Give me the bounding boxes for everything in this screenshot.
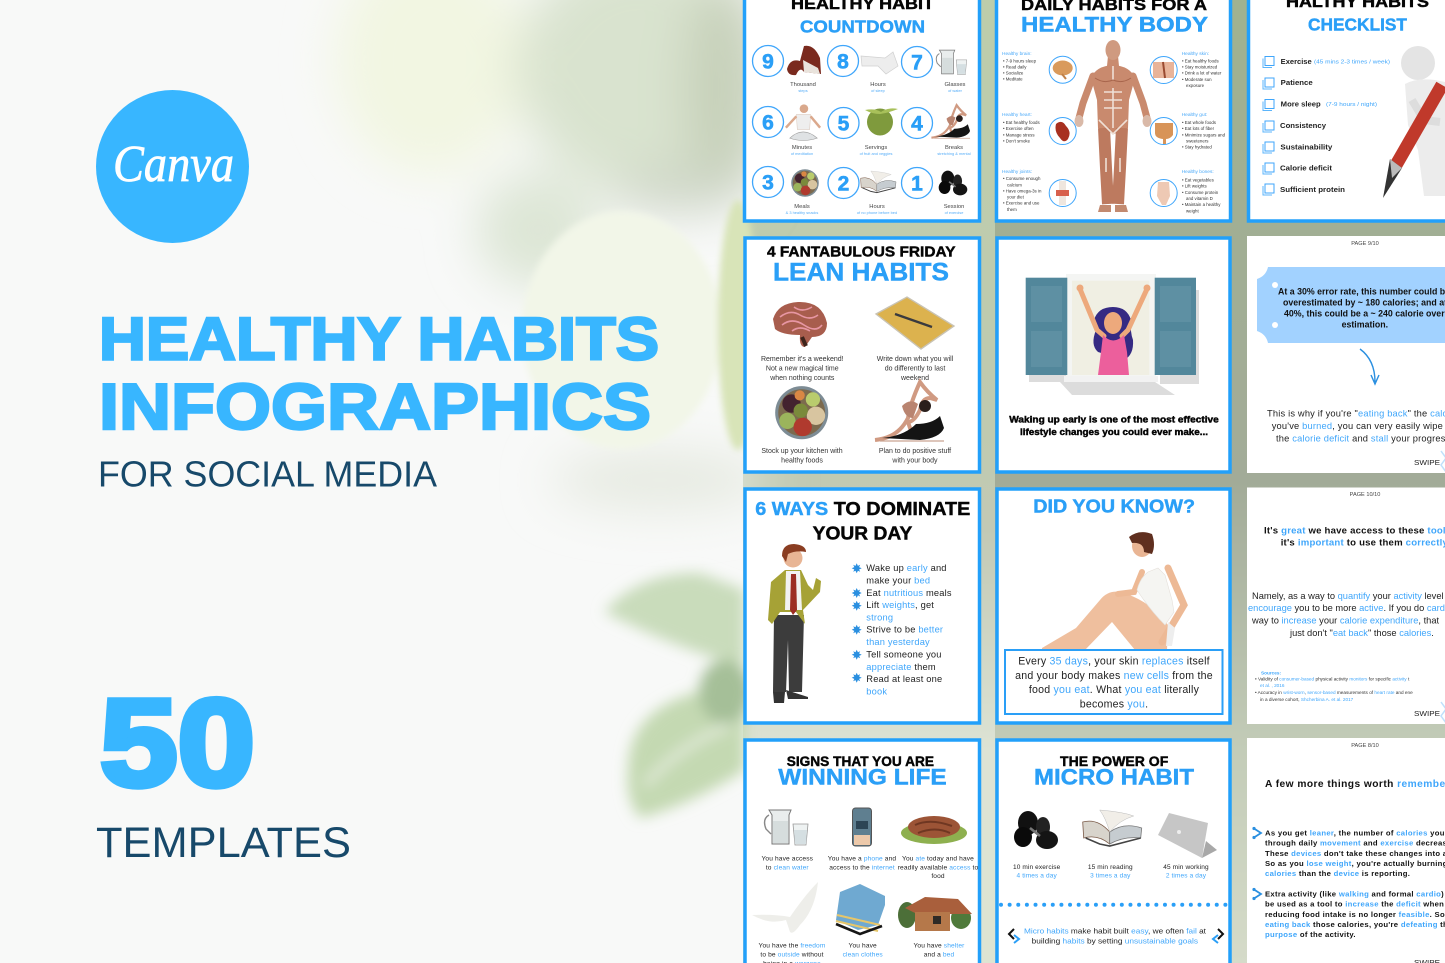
habit: healthy skin: • Moderate sun (1182, 77, 1212, 82)
label: templates: TEMPLATES (96, 819, 351, 867)
callout: error rate tag: 40%, this could be a ~ 240 calorie over (1284, 309, 1445, 319)
heading: winning life: WINNING LIFE (778, 764, 947, 789)
sources list: • Accuracy in wrist-worn, sensor-based measurements of heart rate and ene (1255, 690, 1413, 695)
item: reading: 15 min reading (1088, 864, 1133, 871)
habit: healthy gut: • Minimize sugars and (1182, 132, 1226, 138)
item: notebook: do differently to last (885, 366, 945, 372)
bullet list: ways (852, 563, 952, 696)
panel: healthy habits checklist (1248, 0, 1445, 221)
checklist items: Calorie deficit (1280, 164, 1333, 172)
heading: healthy habit countdown (791, 0, 935, 36)
statement: great tools: it's important to use them correctly (1281, 538, 1445, 549)
countdown item 1 session of exercise: Session (944, 204, 964, 210)
item: yoga pose: with your body (891, 458, 938, 464)
sources list (1255, 670, 1413, 702)
countdown item 3 meals: & 3 healthy snacks (786, 210, 818, 215)
habit: healthy gut (1150, 112, 1226, 150)
bullet list: ways: make your bed (866, 576, 930, 586)
bullet list: ways: Eat nutritious meals (866, 588, 952, 598)
item: food: You ate today and have (902, 856, 974, 863)
arrow down (1360, 349, 1379, 384)
countdown item 8 hours of sleep: 8 (837, 50, 849, 74)
countdown item 2 hours no phone: of no phone before bed (857, 210, 897, 215)
checklist items: More sleep (1281, 100, 1321, 108)
statement: great tools (1264, 525, 1445, 549)
heading: healthy habit countdown: COUNTDOWN (800, 16, 925, 36)
item: exercise (1013, 811, 1061, 880)
heading: micro habit: MICRO HABIT (1034, 764, 1195, 789)
habit: healthy brain: • Socialize (1003, 70, 1024, 76)
heading: 6 ways: YOUR DAY (813, 522, 913, 543)
callout: error rate tag: overestimated by ~ 180 calories; and at (1283, 298, 1445, 308)
habit: healthy bones (1150, 169, 1221, 214)
panel: signs that you are winning life (745, 740, 980, 963)
text block: eating back (1267, 409, 1445, 444)
item: exercise: 10 min exercise (1013, 864, 1061, 871)
big number 50: 50 (100, 674, 255, 812)
habit: healthy gut: Healthy gut: (1182, 112, 1207, 118)
countdown item 7 glasses of water: 7 (911, 52, 923, 74)
habit: healthy joints: Healthy joints: (1002, 169, 1032, 175)
countdown item 8 hours of sleep: of sleep (871, 88, 885, 93)
heading: lean habits: 4 FANTABULOUS FRIDAY (767, 244, 956, 261)
countdown item 4 breaks (902, 105, 971, 156)
checklist items: Sufficient protein (1280, 185, 1345, 194)
item: phone: You have a phone and (828, 856, 896, 863)
callout: skin fact: and your body makes new cells from the (1015, 670, 1213, 682)
callout: micro habits: Micro habits make habit built easy , we often fail at (1024, 926, 1206, 935)
sources list: • Validity of consumer-based physical activity monitors for specific activity t (1255, 676, 1410, 682)
illustration: seated woman (1042, 532, 1184, 652)
callout: skin fact: Every 35 days, your skin replaces itself (1018, 656, 1210, 668)
text block: quantify activity: just don't "eat back" those calories. (1289, 628, 1434, 638)
heading: did you know: DID YOU KNOW? (1033, 496, 1195, 517)
habit: healthy bones: weight (1186, 208, 1199, 214)
habit: healthy joints: calcium (1007, 182, 1022, 188)
countdown item 3 meals: Meals (794, 204, 810, 210)
countdown item 8 hours of sleep (828, 46, 898, 93)
countdown item 9 thousand steps: steps (798, 88, 808, 93)
heading: lean habits (767, 244, 956, 286)
heading: daily habits healthy body: HEALTHY BODY (1021, 14, 1208, 36)
page label: PAGE 10/10 (1350, 492, 1380, 498)
bullet list: ways: appreciate them (866, 662, 936, 672)
panel: waking up early (997, 238, 1230, 472)
item: phone (828, 808, 896, 872)
item: reading (1083, 810, 1142, 880)
habit: healthy skin: • Eat healthy foods (1182, 58, 1219, 64)
countdown item 7 glasses of water: Glasses (945, 82, 966, 88)
title: Healthy Habits Infographics: INFOGRAPHICS (99, 370, 651, 443)
item: clothes: You have (849, 943, 877, 950)
countdown item 9 thousand steps: 9 (762, 50, 774, 74)
swipe indicator: SWIPE (1414, 460, 1440, 467)
countdown item 4 breaks: 4 (911, 112, 923, 136)
countdown item 1 session of exercise: of exercise (945, 210, 963, 215)
item: reading: 3 times a day (1090, 873, 1131, 880)
panel: daily habits for a healthy body (996, 0, 1230, 221)
countdown item 5 servings of fruit: 5 (838, 112, 850, 136)
paragraph: leaner: calories than the device is reporting. (1265, 869, 1410, 878)
paragraph: extra activity: purpose of the activity. (1265, 930, 1356, 939)
item: dove (752, 882, 826, 963)
habit: healthy brain: Healthy brain: (1002, 51, 1032, 57)
item: salad bowl: Stock up your kitchen with (761, 448, 843, 455)
habit: healthy gut: sweeteners (1186, 138, 1209, 144)
paragraph: extra activity (1252, 888, 1445, 939)
countdown item 2 hours no phone: Hours (869, 204, 885, 210)
countdown item 5 servings of fruit (828, 108, 898, 156)
panel: the power of micro habit (997, 740, 1230, 963)
item: clothes (836, 884, 885, 959)
checklist items: Patience (1281, 78, 1313, 87)
countdown item 4 breaks: Breaks (945, 145, 963, 151)
item: food (898, 816, 978, 880)
countdown item 2 hours no phone: 2 (838, 172, 849, 196)
item: dove: You have the freedom (759, 943, 826, 950)
habit: healthy joints (1002, 169, 1076, 212)
countdown item 7 glasses of water: of water (948, 88, 963, 93)
illustration: 3d figure with red pen (1383, 46, 1445, 198)
checklist items: (45 mins 2-3 times / week) (1314, 60, 1390, 66)
countdown item 9 thousand steps: Thousand (790, 82, 816, 88)
heading: lean habits: LEAN HABITS (773, 258, 949, 286)
sources list: in a diverse cohort, Shcherbina A. et al. 2017 (1260, 697, 1354, 702)
bullet list: ways: Lift weights, get (866, 600, 934, 610)
item: clean water: You have access (762, 856, 814, 863)
item: house: and a bed (924, 952, 954, 959)
item: yoga pose: Plan to do positive stuff (879, 448, 951, 455)
item: dove: to be outside without (760, 952, 824, 959)
countdown item 1 session of exercise (902, 168, 967, 215)
panel: 4 fantabulous friday lean habits (745, 238, 980, 472)
page label: PAGE 9/10 (1351, 241, 1379, 247)
callout: skin fact: becomes you. (1080, 699, 1148, 711)
countdown item 9 thousand steps (752, 46, 821, 93)
callout: skin fact: food you eat. What you eat literally (1029, 684, 1200, 696)
heading: 6 ways (755, 498, 970, 543)
bullet list: ways: book (866, 686, 887, 696)
habit: healthy skin: Healthy skin: (1182, 51, 1209, 57)
countdown item 4 breaks: stretching & mental (937, 151, 971, 156)
habit: healthy gut: • Stay hydrated (1182, 144, 1212, 150)
paragraph: extra activity: be used as a tool to increase the deficit when (1265, 900, 1444, 909)
sources list: Sources: (1261, 670, 1281, 676)
panel: did you know (997, 489, 1230, 723)
habit: healthy joints: • Exercise and use (1003, 200, 1040, 206)
title: Healthy Habits Infographics: HEALTHY HABITS (99, 306, 659, 372)
countdown item 5 servings of fruit: Servings (865, 145, 887, 151)
swipe indicator (1414, 451, 1445, 472)
item: exercise: 4 times a day (1017, 873, 1057, 880)
text block: quantify activity: way to increase your calorie expenditure, that (1251, 616, 1440, 626)
text block: quantify activity (1248, 591, 1445, 638)
bullet list: ways: Tell someone you (866, 650, 942, 660)
item: salad bowl (761, 386, 843, 464)
swipe indicator: SWIPE (1414, 711, 1440, 718)
panel: 6 ways to dominate your day (745, 489, 980, 723)
habit: healthy heart: • Don't smoke (1003, 138, 1031, 144)
heading: micro habit: THE POWER OF (1060, 753, 1169, 769)
callout: skin fact (1005, 650, 1222, 714)
bullet list: ways: Strive to be better (866, 625, 943, 635)
habit: healthy skin (1150, 51, 1222, 88)
countdown item 1 session of exercise: 1 (911, 172, 923, 196)
paragraph: leaner (1252, 827, 1445, 878)
item: food: food (931, 873, 945, 880)
habit: healthy gut: • Eat whole foods (1182, 120, 1217, 125)
heading: checklist (1286, 0, 1429, 34)
illustration: man in suit (768, 544, 821, 703)
habit: healthy brain: • Meditate (1003, 76, 1023, 82)
sources list: et al. , 2016 (1260, 683, 1285, 688)
habit: healthy bones: • Lift weights (1182, 184, 1208, 188)
countdown item 3 meals (752, 166, 819, 215)
item: clean water (762, 810, 814, 872)
habit: healthy bones: • Consume protein (1182, 190, 1219, 195)
page label: PAGE 8/10 (1351, 743, 1379, 749)
item: brain: Remember it's a weekend! (761, 356, 844, 363)
habit: healthy joints: them (1007, 207, 1017, 212)
callout: error rate tag: estimation. (1342, 320, 1388, 330)
callout: error rate tag (1257, 267, 1445, 343)
heading: winning life (778, 753, 947, 789)
panel: page 9/10 calorie error (1247, 236, 1445, 473)
caption: waking up early (1009, 414, 1219, 437)
panel: page 8/10 things worth remembering (1247, 738, 1445, 963)
countdown item 6 minutes of meditation: 6 (762, 112, 774, 134)
bullet list: ways: Wake up early and (866, 563, 947, 573)
habit: healthy heart (1002, 112, 1076, 144)
bullet list: ways: Read at least one (866, 674, 942, 684)
item: working: 2 times a day (1166, 873, 1207, 880)
countdown item 5 servings of fruit: of fruit and veggies (860, 151, 892, 156)
subtitle: for social media: FOR SOCIAL MEDIA (98, 454, 437, 494)
habit: healthy bones: • Maintain a healthy (1182, 202, 1221, 207)
heading: micro habit (1034, 753, 1195, 789)
item: phone: access to the internet (829, 865, 895, 872)
habit: healthy heart: • Eat healthy foods (1003, 120, 1040, 125)
panel: page 10/10 tools (1247, 488, 1445, 724)
swipe indicator (1414, 702, 1445, 723)
item: clean water: to clean water (766, 865, 809, 872)
countdown item 8 hours of sleep: Hours (870, 82, 886, 88)
item: notebook: Write down what you will (877, 356, 954, 363)
logo: Canva badge: Canva (113, 136, 234, 193)
item: notebook (876, 297, 954, 382)
illustration: woman at window (1026, 274, 1199, 395)
habit: healthy brain: • 7-9 hours sleep (1003, 58, 1037, 64)
checklist items (1263, 56, 1390, 195)
countdown item 2 hours no phone (828, 168, 897, 215)
text block: quantify activity: Namely, as a way to quantify your activity level (1252, 591, 1444, 601)
logo: Canva badge (96, 90, 249, 243)
heading: winning life: SIGNS THAT YOU ARE (787, 753, 934, 769)
habit: healthy bones: and vitamin D (1186, 196, 1213, 201)
heading: daily habits healthy body (1021, 0, 1208, 36)
item: clothes: clean clothes (843, 952, 883, 959)
habit: healthy heart: Healthy heart: (1002, 112, 1032, 118)
callout: error rate tag: At a 30% error rate, this number could be (1278, 287, 1445, 297)
item: brain: Not a new magical time (766, 366, 839, 372)
heading: 6 ways: 6 WAYS TO DOMINATE (755, 498, 970, 519)
bullet list: ways: strong (866, 612, 893, 622)
habit: healthy brain (1002, 51, 1076, 83)
anatomy figure (1074, 40, 1152, 212)
heading: checklist: CHECKLIST (1308, 14, 1407, 34)
habit: healthy bones: Healthy bones: (1182, 169, 1214, 175)
item: food: readily available access to (898, 865, 978, 872)
checklist items: Exercise (1281, 57, 1312, 66)
callout: micro habits (1009, 926, 1223, 945)
checklist items: (7-9 hours / night) (1326, 102, 1377, 108)
item: working (1158, 813, 1217, 880)
habit: healthy joints: your diet (1007, 194, 1025, 200)
title: Healthy Habits Infographics (99, 306, 659, 443)
callout: micro habits: building habits by setting unsustainable goals (1032, 936, 1198, 945)
countdown item 6 minutes of meditation: of meditation (791, 151, 813, 156)
habit: healthy gut: • Eat lots of fiber (1182, 126, 1215, 131)
item: notebook: weekend (900, 375, 929, 382)
habit: healthy joints: • Have omega-3s in (1003, 188, 1042, 194)
countdown item 3 meals: 3 (762, 172, 774, 194)
habit: healthy bones: • Eat vegetables (1182, 178, 1215, 182)
caption: waking up early: lifestyle changes you could ever make... (1020, 426, 1208, 437)
item: salad bowl: healthy foods (781, 458, 823, 464)
dotted divider (1001, 903, 1228, 907)
item: working: 45 min working (1163, 864, 1209, 871)
bullet list: ways: than yesterday (866, 637, 930, 647)
habit: healthy skin: • Drink a lot of water (1182, 70, 1222, 76)
habit: healthy heart: • Manage stress (1003, 132, 1035, 138)
item: yoga pose (875, 382, 951, 464)
countdown item 7 glasses of water (902, 46, 967, 93)
item: house: You have shelter (914, 943, 965, 950)
item: brain (761, 302, 844, 382)
habit: healthy heart: • Exercise often (1003, 126, 1034, 131)
habit: healthy skin: • Stay moisturized (1182, 64, 1218, 70)
caption: waking up early: Waking up early is one of the most effective (1009, 414, 1219, 425)
countdown item 6 minutes of meditation (752, 104, 820, 156)
countdown item 6 minutes of meditation: Minutes (792, 145, 812, 151)
item: house (898, 897, 972, 959)
checklist items: Sustainability (1280, 142, 1333, 152)
habit: healthy brain: • Read daily (1003, 64, 1027, 70)
habit: healthy joints: • Consume enough (1003, 176, 1041, 181)
panel: healthy habit countdown (744, 0, 980, 221)
habit: healthy skin: exposure (1186, 83, 1205, 88)
checklist items: Consistency (1280, 121, 1327, 130)
item: brain: when nothing counts (769, 375, 835, 382)
